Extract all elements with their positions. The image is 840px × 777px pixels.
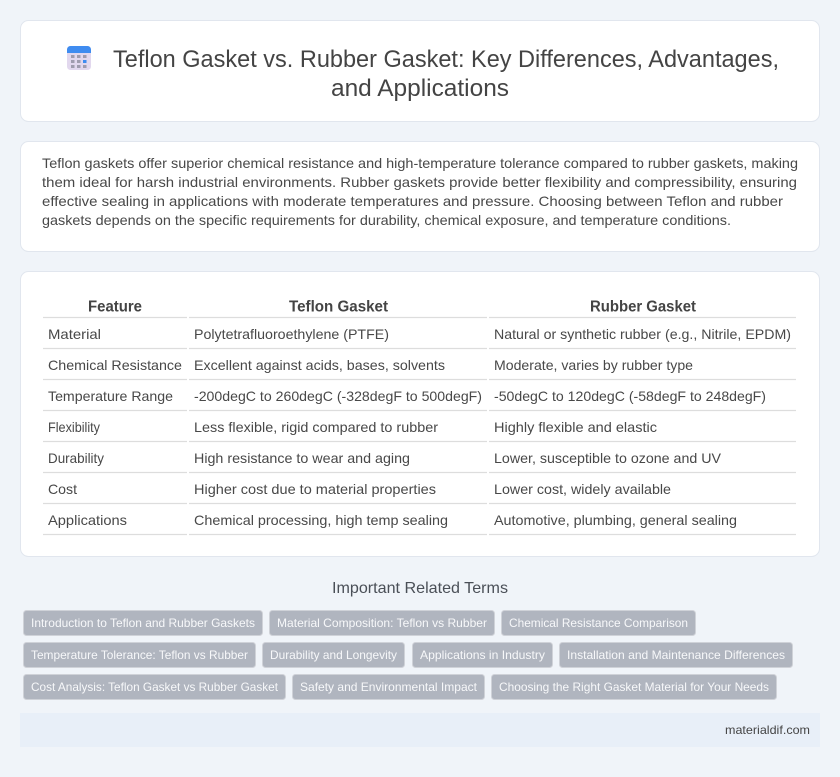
title: Teflon Gasket vs. Rubber Gasket: Key Differences, Advantages, [113,46,779,73]
table row: Chemical Resistance: Excellent against acids, bases, solvents [194,357,445,373]
table row: Flexibility: Highly flexible and elastic [494,419,657,435]
tag: Choosing the Right Gasket Material for Your Needs [499,680,769,694]
tag list: related terms [24,610,792,700]
table row: Applications: Applications [48,512,127,528]
tag [502,610,696,636]
tag [412,642,552,668]
table row: Flexibility: Flexibility [48,419,100,435]
table row: Durability [48,450,722,466]
tag: Material Composition: Teflon vs Rubber [277,616,487,630]
title: and Applications [331,75,509,102]
table header row [88,298,697,316]
icon: calendar [67,46,91,70]
footer source text: materialdif.com [725,723,810,737]
table row: Material: Polytetrafluoroethylene (PTFE) [194,326,389,342]
table row: Cost: Lower cost, widely available [494,481,671,497]
table row: Durability: Lower, susceptible to ozone and UV [494,450,722,466]
table row: Cost: Higher cost due to material properties [194,481,436,497]
tag: Chemical Resistance Comparison [509,616,688,630]
tag: Temperature Tolerance: Teflon vs Rubber [31,648,248,662]
text block: introduction: gaskets depends on the specific requirements for durability, chemical exposure, and temperature conditions. [42,212,731,228]
table row: Durability: Durability [48,450,104,466]
table row: Temperature Range [48,388,766,404]
table header row: Feature [88,298,142,316]
table row: Flexibility: Less flexible, rigid compared to rubber [194,419,438,435]
tag [24,610,262,636]
text block: introduction: effective sealing in applications with moderate temperatures and pressure. Choosing between Teflon and rubber [42,193,783,209]
table row: Material: Natural or synthetic rubber (e.g., Nitrile, EPDM) [494,326,791,342]
tag [492,674,776,700]
tag [560,642,792,668]
panel: comparison table [20,272,820,556]
tag: Introduction to Teflon and Rubber Gaskets [31,616,255,630]
table header row: Teflon Gasket [289,298,389,316]
tag: Cost Analysis: Teflon Gasket vs Rubber Gasket [31,680,279,694]
tag: Safety and Environmental Impact [300,680,478,694]
tag: Durability and Longevity [270,648,397,662]
footer [20,713,820,747]
table row: Chemical Resistance: Chemical Resistance [48,357,182,373]
heading: related terms: Important Related Terms [332,580,508,597]
tag [24,674,286,700]
table row: Applications: Automotive, plumbing, general sealing [494,512,737,528]
tag [24,642,256,668]
panel: introduction text [20,142,820,252]
panel: header [20,20,820,122]
tag [270,610,494,636]
table row: Chemical Resistance: Moderate, varies by rubber type [494,357,693,373]
table row: Applications: Chemical processing, high temp sealing [194,512,448,528]
table row: Temperature Range: -200degC to 260degC (-328degF to 500degF) [194,388,482,404]
table row: Cost: Cost [48,481,77,497]
table header row: Rubber Gasket [590,298,697,316]
table row: Flexibility [48,419,657,435]
text block: introduction: Teflon gaskets offer superior chemical resistance and high-temperature tolerance compared to rubber gaskets, making [42,155,798,171]
table row: Cost [48,481,671,497]
table row: Temperature Range: -50degC to 120degC (-58degF to 248degF) [494,388,766,404]
table row: Durability: High resistance to wear and aging [194,450,410,466]
text block: introduction [42,155,798,228]
table row: Chemical Resistance [48,357,693,373]
tag: Applications in Industry [420,648,545,662]
table row: Material: Material [48,326,101,342]
tag [292,674,484,700]
table row: Temperature Range: Temperature Range [48,388,173,404]
table row: Applications [48,512,737,528]
table row: Material [48,326,791,342]
tag [262,642,404,668]
tag: Installation and Maintenance Differences [567,648,785,662]
title [113,46,779,102]
text block: introduction: them ideal for harsh industrial environments. Rubber gaskets provide better flexibility and compressibility, ensuring [42,174,797,190]
